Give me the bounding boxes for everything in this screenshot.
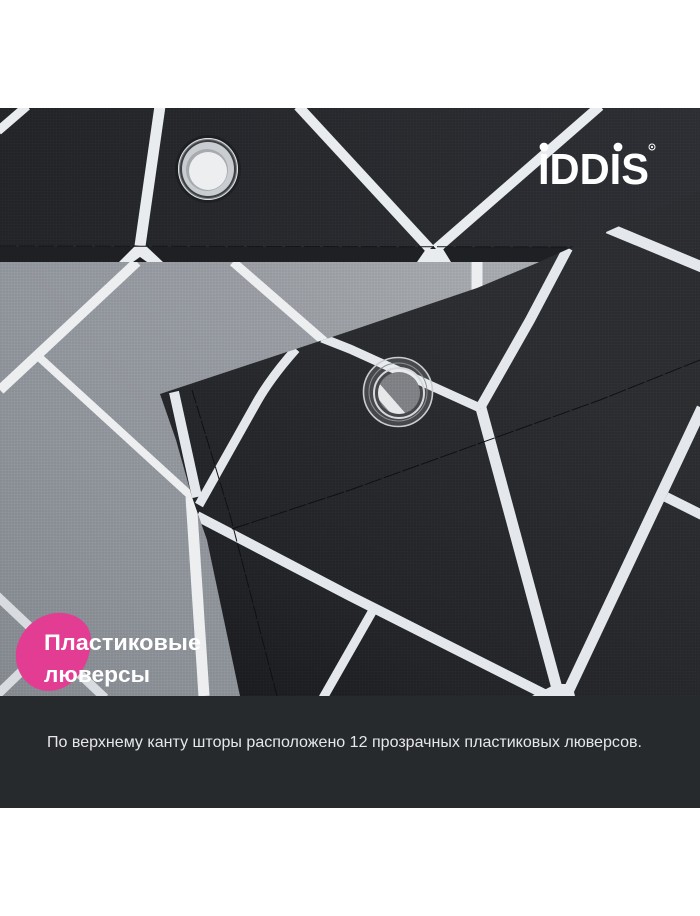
heading: plastic grommets [44,630,201,687]
caption text: По верхнему канту шторы расположено 12 прозрачных пластиковых люверсов. [47,734,642,751]
flap stitching [192,360,700,696]
pink blob behind heading [16,613,91,691]
front flap fabric [160,190,700,698]
bottom caption band [0,696,700,808]
icon: lower plastic grommet [363,357,433,427]
heading: plastic grommets: люверсы [44,662,150,687]
icon: logo iDDiS: IDDIS [538,145,649,194]
top dark hem fabric [0,106,700,262]
heading: plastic grommets: Пластиковые [44,630,201,655]
infographic canvas [0,108,700,808]
photo: curtain fabric [0,106,700,698]
icon: upper plastic grommet [175,135,241,203]
gray translucent curtain layer [0,258,560,698]
